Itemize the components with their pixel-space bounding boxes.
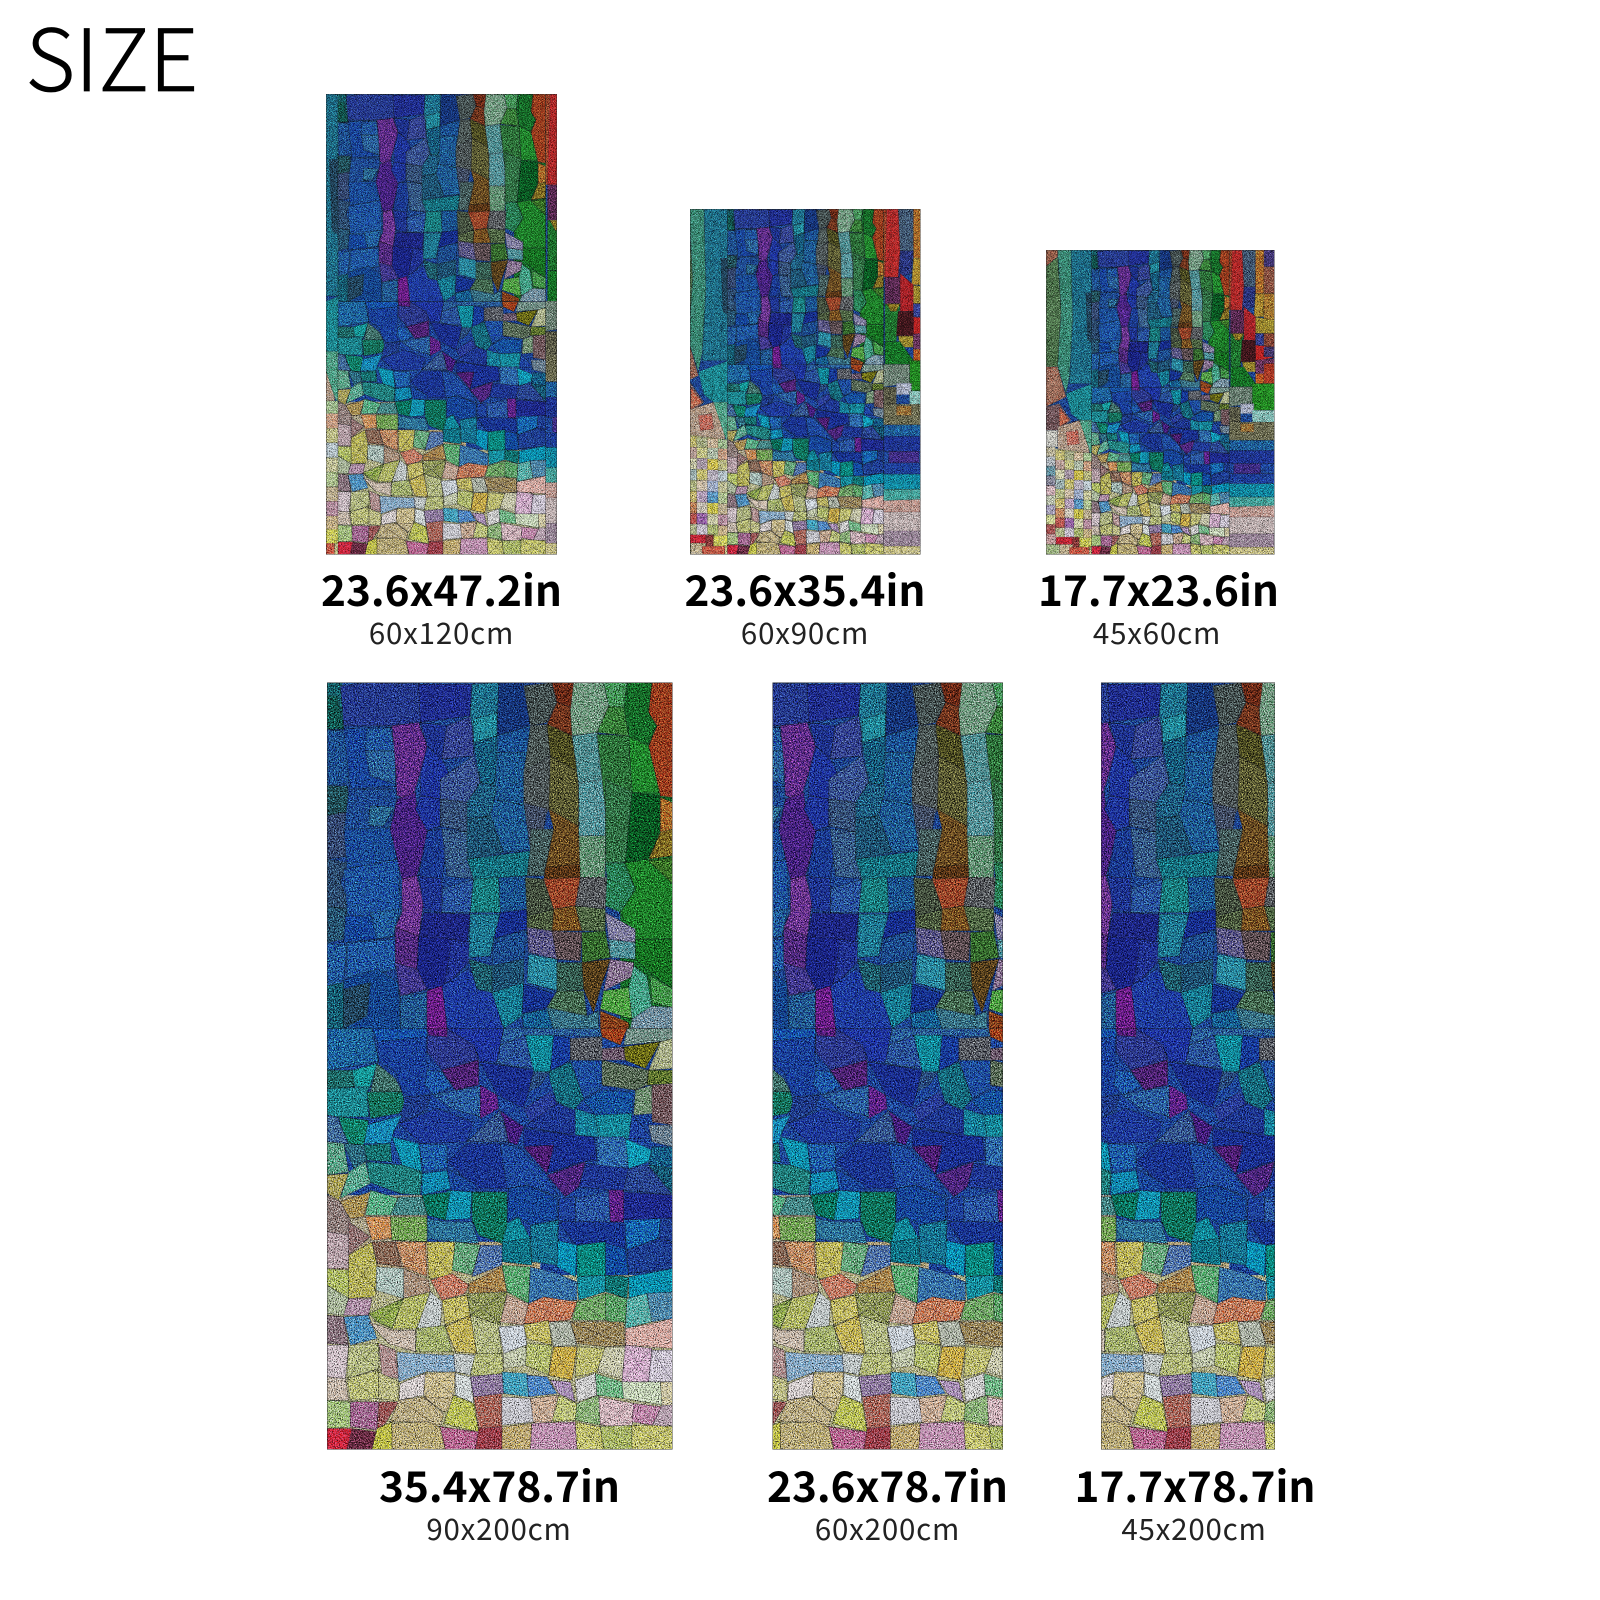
- size label inches: 23.6x35.4in: [685, 558, 925, 619]
- size label inches: 35.4x78.7in: [379, 1454, 620, 1515]
- size label inches: 23.6x78.7in: [767, 1454, 1008, 1515]
- panel: 23.6x47.2in: [269, 94, 616, 653]
- size label centimetres: 60x90cm: [741, 611, 869, 653]
- size label inches: 17.7x23.6in: [1038, 558, 1279, 619]
- panel: 17.7x23.6in: [1038, 250, 1279, 653]
- size label inches: 17.7x78.7in: [1075, 1454, 1315, 1515]
- size label centimetres: 90x200cm: [426, 1507, 572, 1549]
- mosaic print 45x200cm: [1101, 682, 1275, 1450]
- size label centimetres: 45x60cm: [1093, 611, 1221, 653]
- panel: 35.4x78.7in: [212, 682, 790, 1549]
- size label inches: 23.6x47.2in: [321, 558, 562, 619]
- size label centimetres: 60x120cm: [369, 611, 514, 653]
- panel: 23.6x35.4in: [676, 209, 936, 653]
- mosaic print 45x60cm: [1046, 250, 1274, 554]
- panel: 23.6x78.7in: [601, 682, 1178, 1549]
- mosaic print 90x200cm: [327, 682, 672, 1450]
- size label centimetres: 45x200cm: [1121, 1507, 1267, 1549]
- size label centimetres: 60x200cm: [815, 1507, 960, 1549]
- mosaic print 60x90cm: [690, 209, 920, 554]
- mosaic print 60x120cm: [326, 94, 557, 554]
- mosaic print 60x200cm: [772, 682, 1003, 1450]
- panel: 17.7x78.7in: [901, 682, 1479, 1549]
